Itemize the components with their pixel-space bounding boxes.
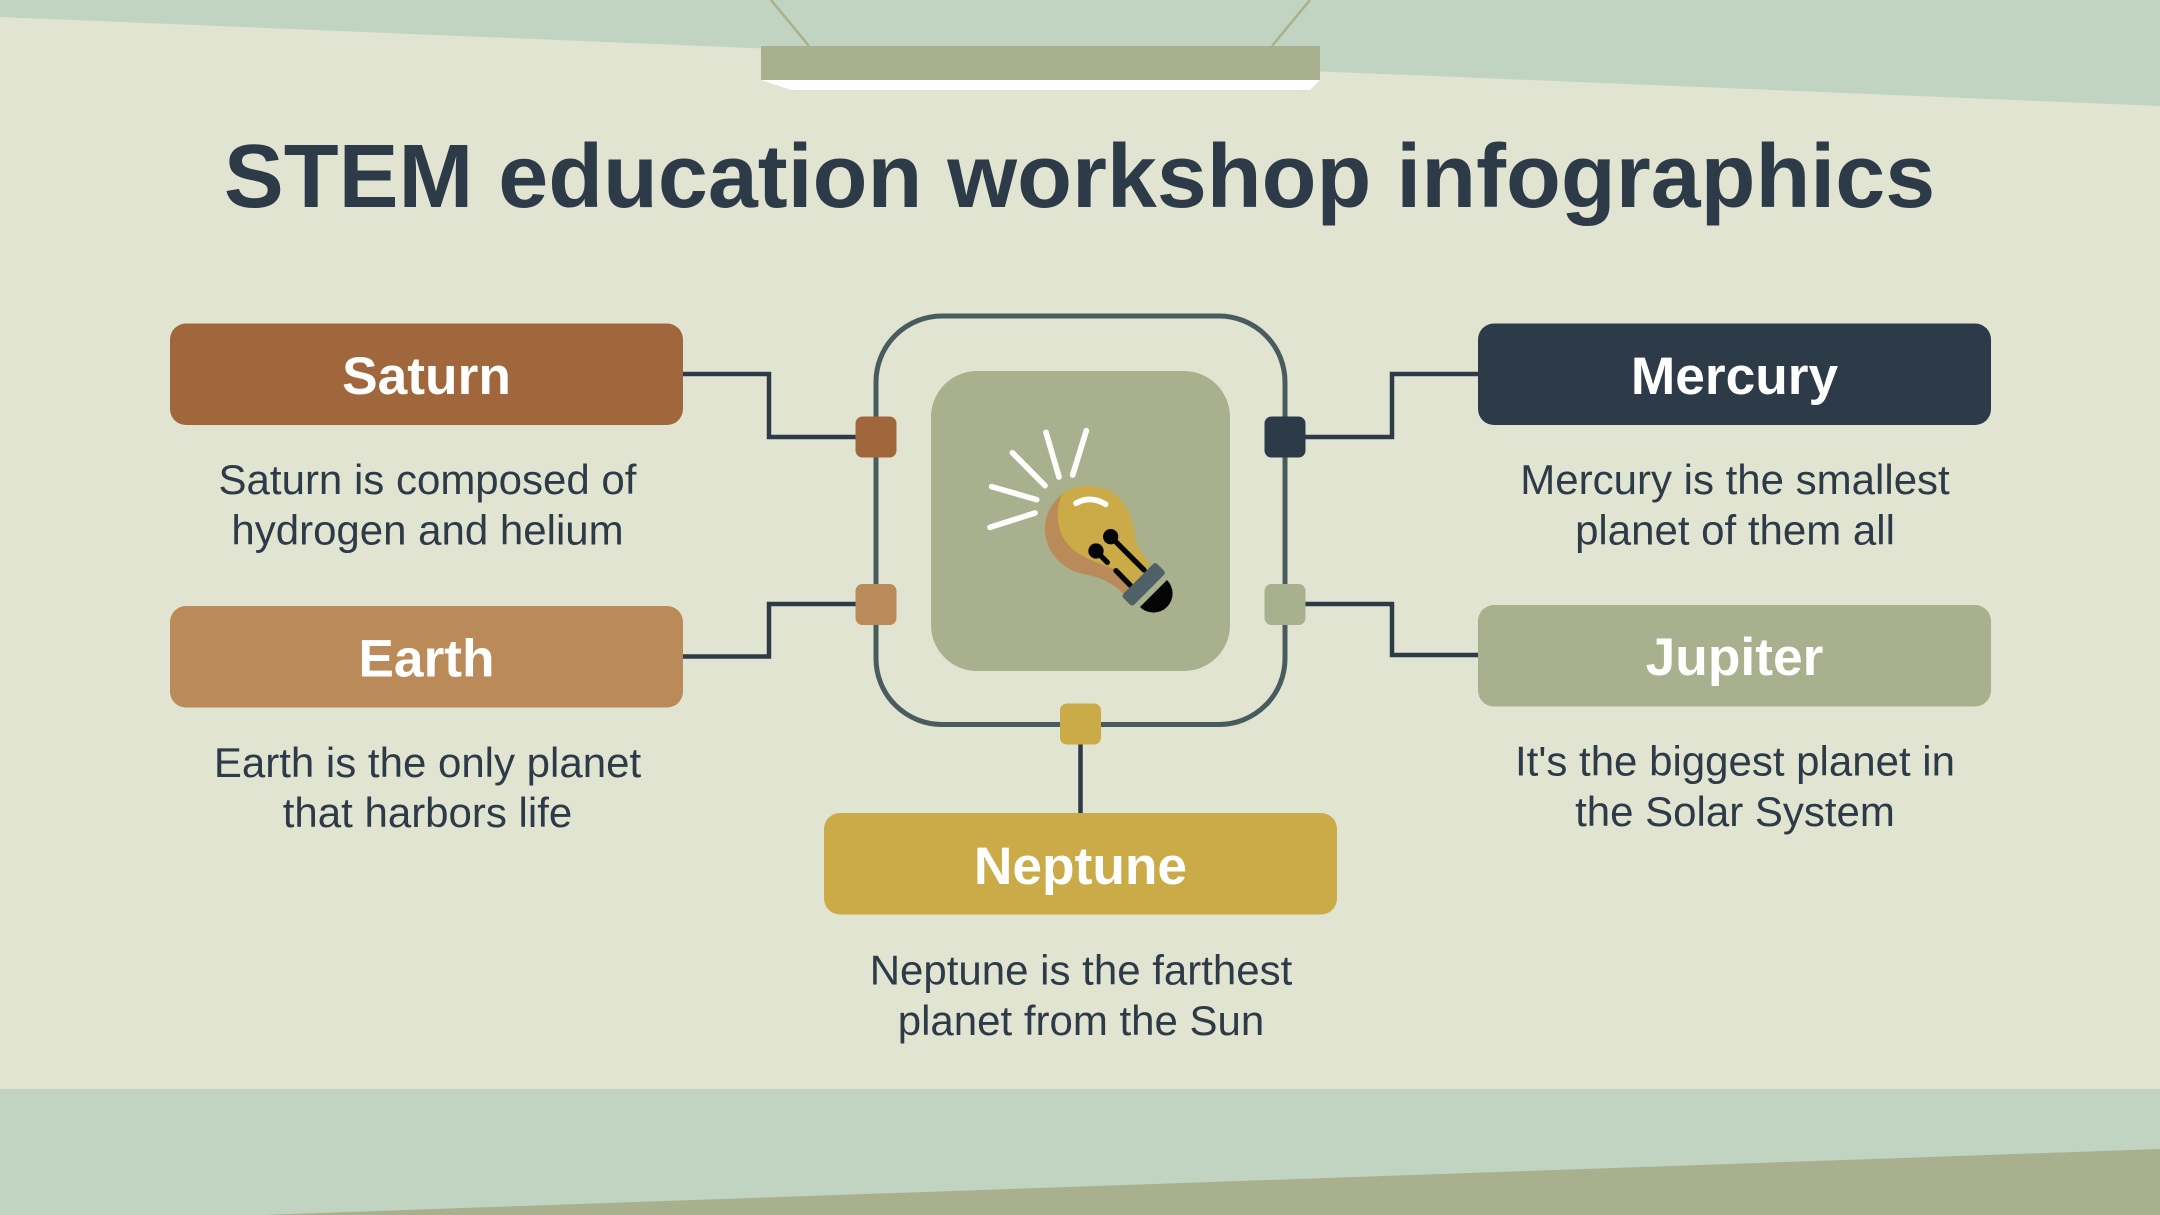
node: Neptune: [1060, 704, 1101, 744]
panel: Neptune: Neptune is the farthest: [870, 946, 1293, 994]
panel: Saturn: [170, 324, 683, 554]
connector: Jupiter: [1300, 604, 1478, 655]
bottom background band: [0, 1089, 2160, 1215]
panel: Earth: Earth: [358, 630, 495, 688]
connector: Mercury: [1300, 374, 1478, 437]
panel: Saturn: hydrogen and helium: [231, 506, 624, 554]
node: Earth: [856, 584, 896, 625]
central rounded frame: [876, 316, 1285, 724]
panel: Mercury: Mercury is the smallest: [1520, 456, 1950, 503]
panel: Neptune: planet from the Sun: [898, 997, 1264, 1044]
panel: Jupiter: the Solar System: [1575, 788, 1895, 835]
connector: Earth: [683, 604, 860, 656]
panel: Earth: [170, 606, 683, 836]
node: Jupiter: [1264, 584, 1306, 625]
top background band: [0, 0, 2160, 106]
ceiling lamp: [761, 0, 1320, 90]
connector: Neptune: [1078, 740, 1083, 813]
connector: Saturn: [683, 374, 860, 437]
bottom olive wedge: [262, 1149, 2160, 1215]
panel: Jupiter: It's the biggest planet in: [1515, 738, 1955, 784]
panel: Jupiter: [1478, 605, 1991, 835]
node: Saturn: [856, 416, 896, 458]
title: STEM education workshop infographics: [224, 127, 1935, 227]
panel: Mercury: planet of them all: [1575, 506, 1895, 554]
central icon tile: [931, 371, 1230, 671]
panel: Neptune: Neptune: [974, 837, 1187, 896]
panel: Saturn: Saturn is composed of: [219, 456, 637, 503]
panel: Saturn: Saturn: [342, 347, 511, 406]
icon: light bulb: [990, 431, 1173, 613]
panel: Mercury: Mercury: [1631, 347, 1839, 406]
panel: Mercury: [1478, 324, 1991, 554]
panel: Neptune: [824, 813, 1337, 1044]
node: Mercury: [1264, 416, 1306, 458]
panel: Earth: that harbors life: [283, 789, 572, 836]
panel: Earth: Earth is the only planet: [214, 739, 641, 786]
panel: Jupiter: Jupiter: [1646, 628, 1823, 687]
